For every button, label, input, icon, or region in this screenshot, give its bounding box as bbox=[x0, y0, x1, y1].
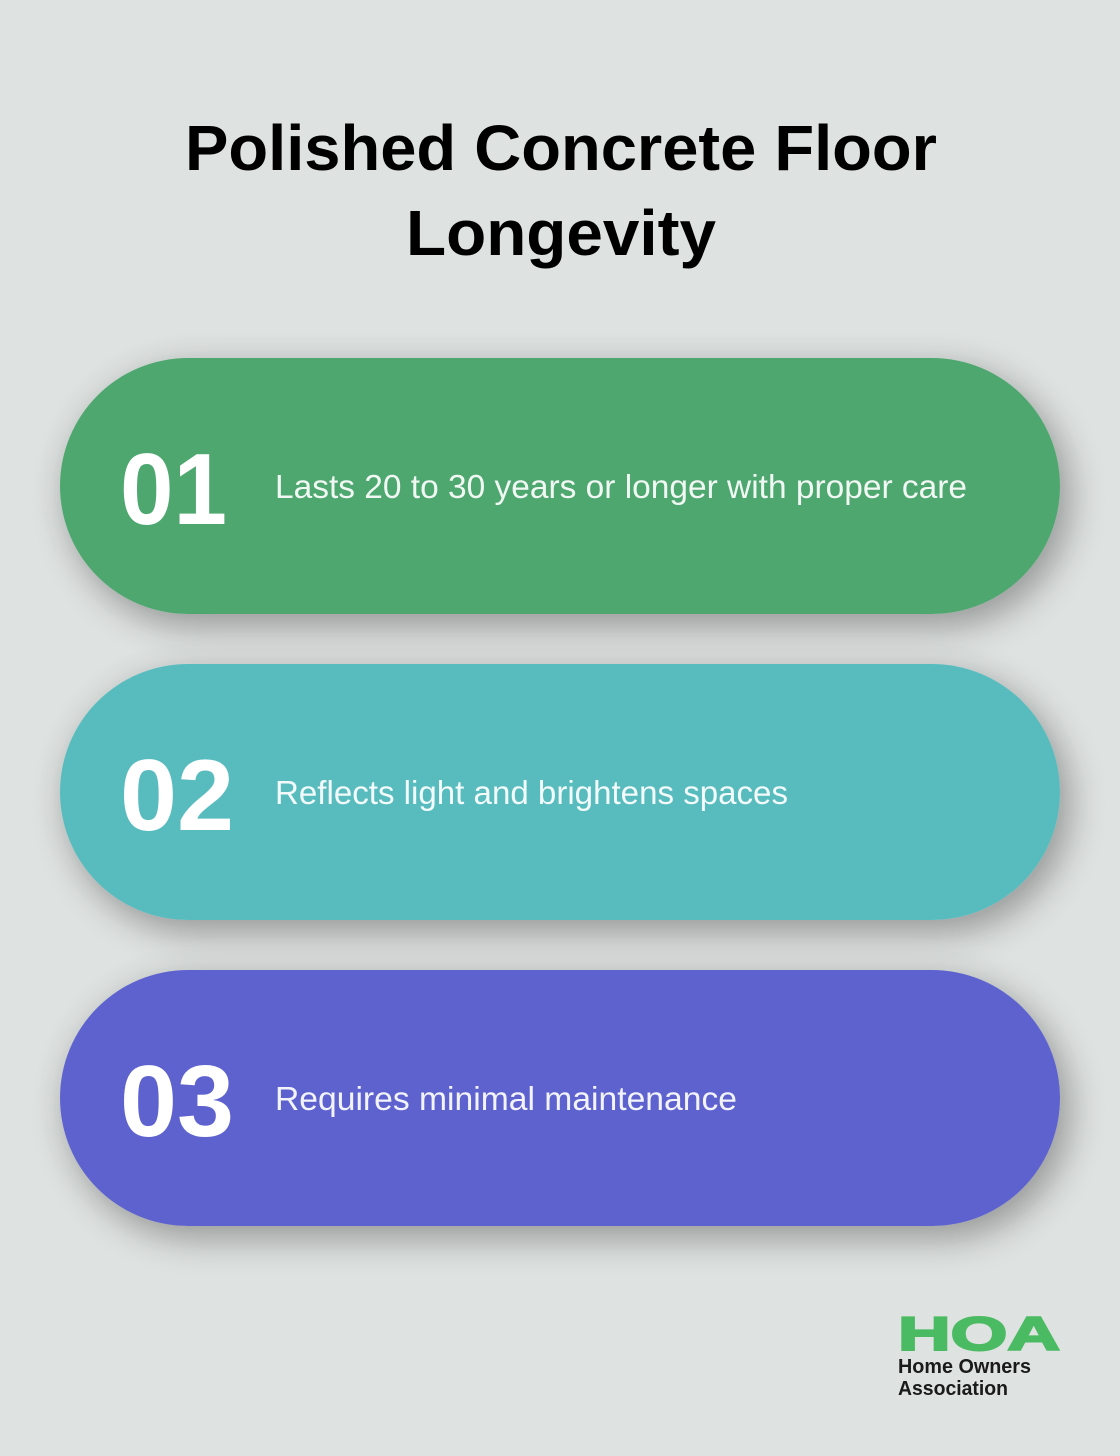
title bbox=[185, 112, 937, 269]
item 2 content: 02 bbox=[120, 740, 234, 852]
title: Longevity bbox=[406, 197, 716, 269]
item 1 content: Lasts 20 to 30 years or longer with proper care bbox=[275, 468, 967, 505]
item 3 content bbox=[120, 1046, 737, 1158]
item 1 content: 01 bbox=[120, 434, 227, 546]
item 3 content: 03 bbox=[120, 1046, 234, 1158]
item 1 content bbox=[120, 434, 967, 546]
logo: HOA Home Owners Association: Home Owners bbox=[898, 1356, 1031, 1378]
panel: item 1 background bbox=[60, 358, 1060, 614]
logo: HOA Home Owners Association: HOA bbox=[898, 1307, 1060, 1360]
logo: HOA Home Owners Association bbox=[898, 1307, 1060, 1400]
panel: item 3 background bbox=[60, 970, 1060, 1226]
title: Polished Concrete Floor bbox=[185, 112, 937, 184]
logo: HOA Home Owners Association: Association bbox=[898, 1378, 1008, 1400]
panel: item 2 background bbox=[60, 664, 1060, 920]
item 3 content: Requires minimal maintenance bbox=[275, 1080, 737, 1117]
item 2 content bbox=[120, 740, 788, 852]
item 2 content: Reflects light and brightens spaces bbox=[275, 774, 788, 811]
